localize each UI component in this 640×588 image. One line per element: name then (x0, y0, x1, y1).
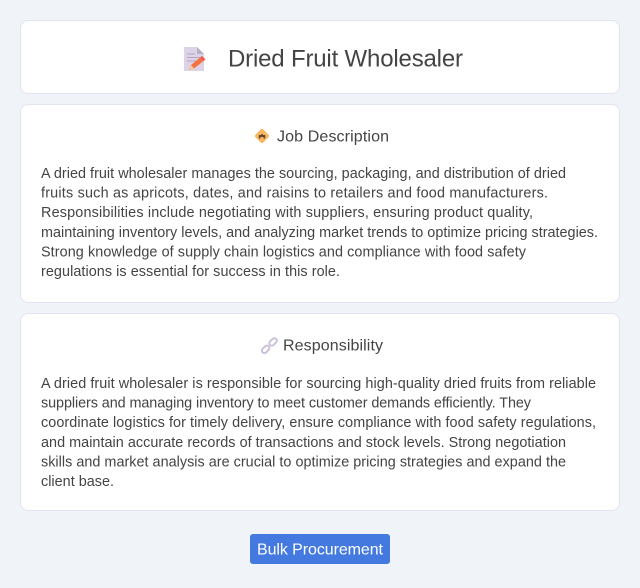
text block: responsibility: skills and market analysis are crucial to optimize pricing strategies and expand the (41, 454, 566, 470)
heading: job description: Job Description (277, 128, 389, 146)
text block: responsibility: coordinate logistics for timely delivery, ensure compliance with food safety regulations, (41, 415, 596, 431)
panel: title header (20, 20, 620, 94)
text block: job description: maintaining inventory levels, and analyzing market trends to optimize pricing strategies. (41, 225, 598, 241)
text block: responsibility: A dried fruit wholesaler is responsible for sourcing high-quality dried fruits from reliable (41, 376, 596, 392)
text block: responsibility: and maintain accurate records of transactions and stock levels. Strong negotiation (41, 435, 566, 451)
heading: responsibility: Responsibility (283, 338, 383, 354)
panel: job description (20, 104, 620, 303)
text block: job description: Responsibilities include negotiating with suppliers, ensuring product quality, (41, 205, 533, 221)
text block: job description: Strong knowledge of supply chain logistics and compliance with food safety (41, 244, 527, 260)
text block: responsibility (41, 376, 596, 490)
title: Dried Fruit Wholesaler (228, 46, 463, 72)
icon: chain link (260, 337, 278, 354)
panel: responsibility (20, 313, 620, 511)
button: bulk procurement (250, 534, 390, 564)
icon: orange diamond (255, 128, 269, 144)
text block: job description: fruits such as apricots, dates, and raisins to retailers and food manufacturers. (41, 186, 548, 202)
text block: job description: regulations is essential for success in this role. (41, 264, 340, 280)
icon: document with pencil (184, 47, 206, 71)
text block: responsibility: client base. (41, 474, 114, 490)
text block: responsibility: suppliers and managing inventory to meet customer demands efficiently. They (41, 396, 532, 412)
text block: job description (41, 166, 598, 280)
text block: job description: A dried fruit wholesaler manages the sourcing, packaging, and distribution of dried (41, 166, 566, 182)
button: bulk procurement: Bulk Procurement (257, 542, 384, 558)
